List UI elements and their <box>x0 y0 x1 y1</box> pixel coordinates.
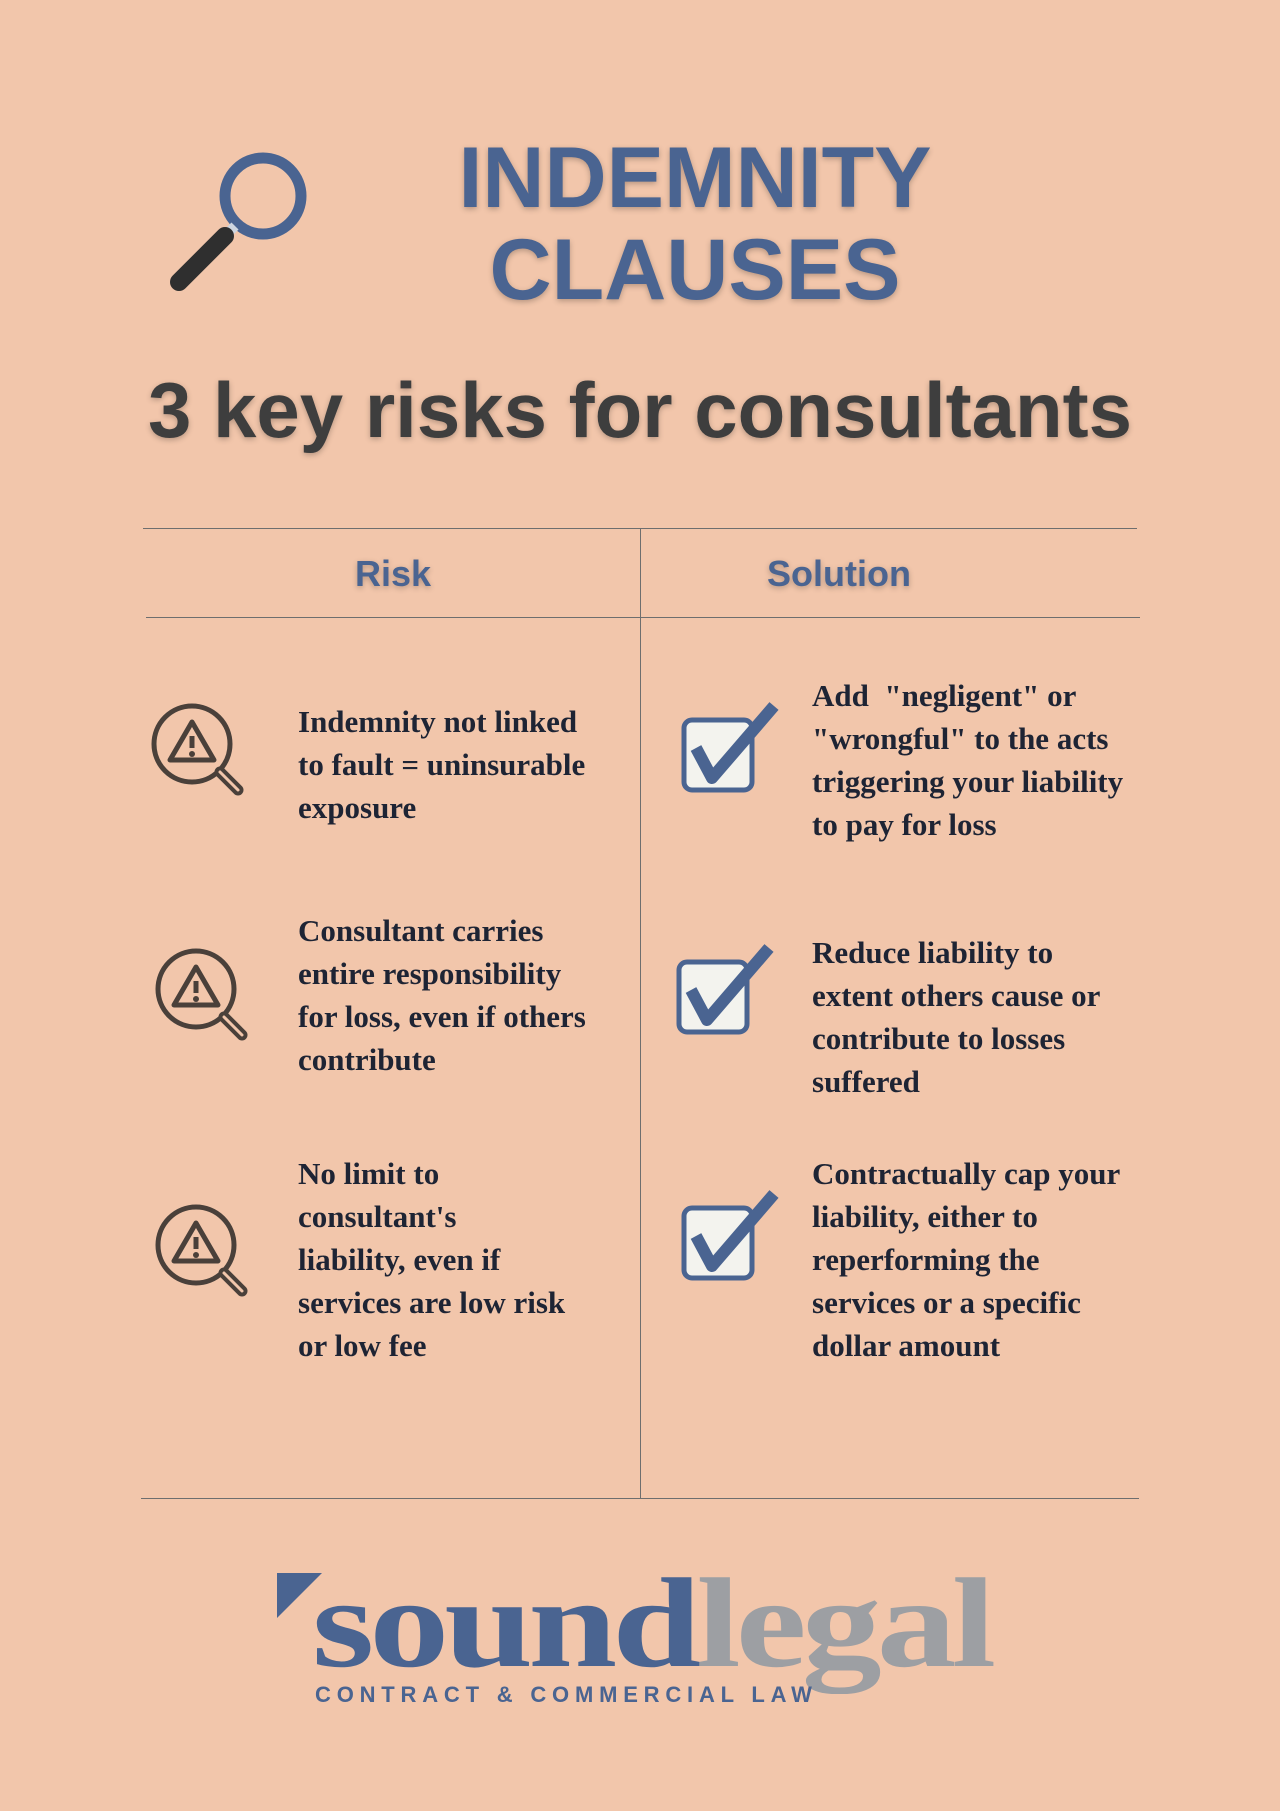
solution text 2: extent others cause or <box>812 978 1100 1013</box>
logo <box>277 1552 994 1707</box>
risk text 1: to fault = uninsurable <box>298 747 585 782</box>
risk text 3: or low fee <box>298 1328 427 1363</box>
icon: risk 3 <box>156 1204 248 1296</box>
logo tagline: CONTRACT & COMMERCIAL LAW <box>315 1682 818 1707</box>
solution text 3: services or a specific <box>812 1285 1081 1320</box>
table lines <box>143 528 1137 529</box>
logo wordmark: soundlegal <box>312 1552 991 1694</box>
risk text 3: No limit to <box>298 1156 439 1191</box>
subtitle: 3 key risks for consultants <box>148 366 1132 454</box>
icon: check 2 <box>676 944 774 1034</box>
risk text 1 <box>298 704 585 825</box>
solution text 2: contribute to losses <box>812 1021 1065 1056</box>
solution text 1 <box>812 678 1123 842</box>
risk text 2: for loss, even if others <box>298 999 586 1034</box>
solution text 1: Add "negligent" or <box>812 678 1076 713</box>
solution text 3 <box>812 1156 1120 1363</box>
solution text 1: to pay for loss <box>812 807 997 842</box>
icon: risk 1 <box>152 704 244 796</box>
risk text 1: Indemnity not linked <box>298 704 577 739</box>
risk text 2: entire responsibility <box>298 956 561 991</box>
solution text 3: liability, either to <box>812 1199 1038 1234</box>
header: Solution: Solution <box>767 553 911 594</box>
solution text 2 <box>812 935 1100 1099</box>
title: INDEMNITY <box>458 130 932 226</box>
risk text 2: contribute <box>298 1042 436 1077</box>
solution text 1: "wrongful" to the acts <box>812 721 1108 756</box>
header: Risk: Risk <box>355 553 431 594</box>
risk text 2: Consultant carries <box>298 913 543 948</box>
solution text 2: Reduce liability to <box>812 935 1053 970</box>
solution text 1: triggering your liability <box>812 764 1123 799</box>
risk text 3: liability, even if <box>298 1242 500 1277</box>
risk text 2 <box>298 913 586 1077</box>
solution text 3: dollar amount <box>812 1328 1000 1363</box>
risk text 3 <box>298 1156 566 1363</box>
title: CLAUSES <box>490 222 900 318</box>
icon: risk 2 <box>156 948 248 1040</box>
solution text 2: suffered <box>812 1064 920 1099</box>
solution text 3: reperforming the <box>812 1242 1040 1277</box>
risk text 3: services are low risk <box>298 1285 565 1320</box>
icon: check 1 <box>682 702 778 792</box>
risk text 3: consultant's <box>298 1199 456 1234</box>
title <box>458 130 932 318</box>
icon: check 3 <box>682 1190 778 1280</box>
logo mark triangle <box>277 1573 322 1618</box>
icon: magnifying glass <box>170 152 306 291</box>
risk text 1: exposure <box>298 790 416 825</box>
solution text 3: Contractually cap your <box>812 1156 1120 1191</box>
